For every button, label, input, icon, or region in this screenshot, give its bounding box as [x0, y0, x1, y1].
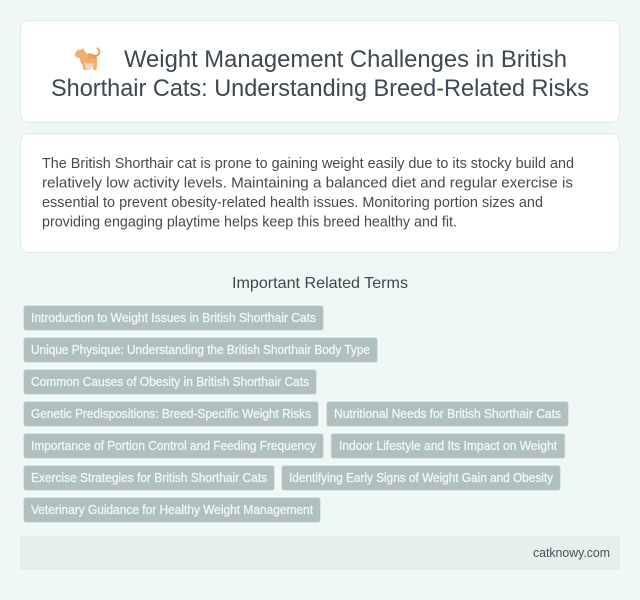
chips: related terms: [24, 306, 568, 522]
chip: [24, 434, 324, 458]
chip: [24, 466, 274, 490]
chip: Unique Physique: Understanding the British Shorthair Body Type: [31, 343, 370, 357]
description text: relatively low activity levels. Maintaining a balanced diet and regular exercise is: [42, 176, 573, 192]
chip: [24, 338, 378, 362]
title: Shorthair Cats: Understanding Breed-Related Risks: [51, 75, 589, 102]
chip: Veterinary Guidance for Healthy Weight Management: [31, 503, 313, 517]
chip: [24, 370, 316, 394]
icon: cat: [75, 47, 100, 70]
chip: Common Causes of Obesity in British Shorthair Cats: [31, 375, 309, 389]
chip: Identifying Early Signs of Weight Gain and Obesity: [289, 471, 554, 485]
title: Weight Management Challenges in British: [124, 46, 567, 73]
chip: Importance of Portion Control and Feeding Frequency: [31, 439, 317, 453]
chip: Introduction to Weight Issues in British Shorthair Cats: [31, 311, 316, 325]
chip: Genetic Predispositions: Breed-Specific Weight Risks: [31, 407, 311, 421]
chip: Nutritional Needs for British Shorthair Cats: [334, 407, 561, 421]
description text: providing engaging playtime helps keep this breed healthy and fit.: [42, 214, 457, 230]
description text: [42, 156, 574, 230]
description text: The British Shorthair cat is prone to gaining weight easily due to its stocky build and: [42, 156, 574, 172]
title: [51, 46, 589, 102]
chip: [24, 498, 320, 522]
chip: [282, 466, 560, 490]
footer: [20, 536, 620, 570]
chip: Indoor Lifestyle and Its Impact on Weight: [339, 439, 557, 453]
heading: related terms: Important Related Terms: [232, 275, 408, 292]
chip: [331, 434, 565, 458]
panel: description: [20, 134, 620, 252]
footer credit: catknowy.com: [533, 546, 610, 560]
description text: essential to prevent obesity-related health issues. Monitoring portion sizes and: [42, 195, 543, 211]
chip: [24, 306, 324, 330]
chip: [24, 402, 318, 426]
chip: Exercise Strategies for British Shorthair Cats: [31, 471, 267, 485]
chip: [326, 402, 568, 426]
panel: title card: [20, 20, 620, 122]
